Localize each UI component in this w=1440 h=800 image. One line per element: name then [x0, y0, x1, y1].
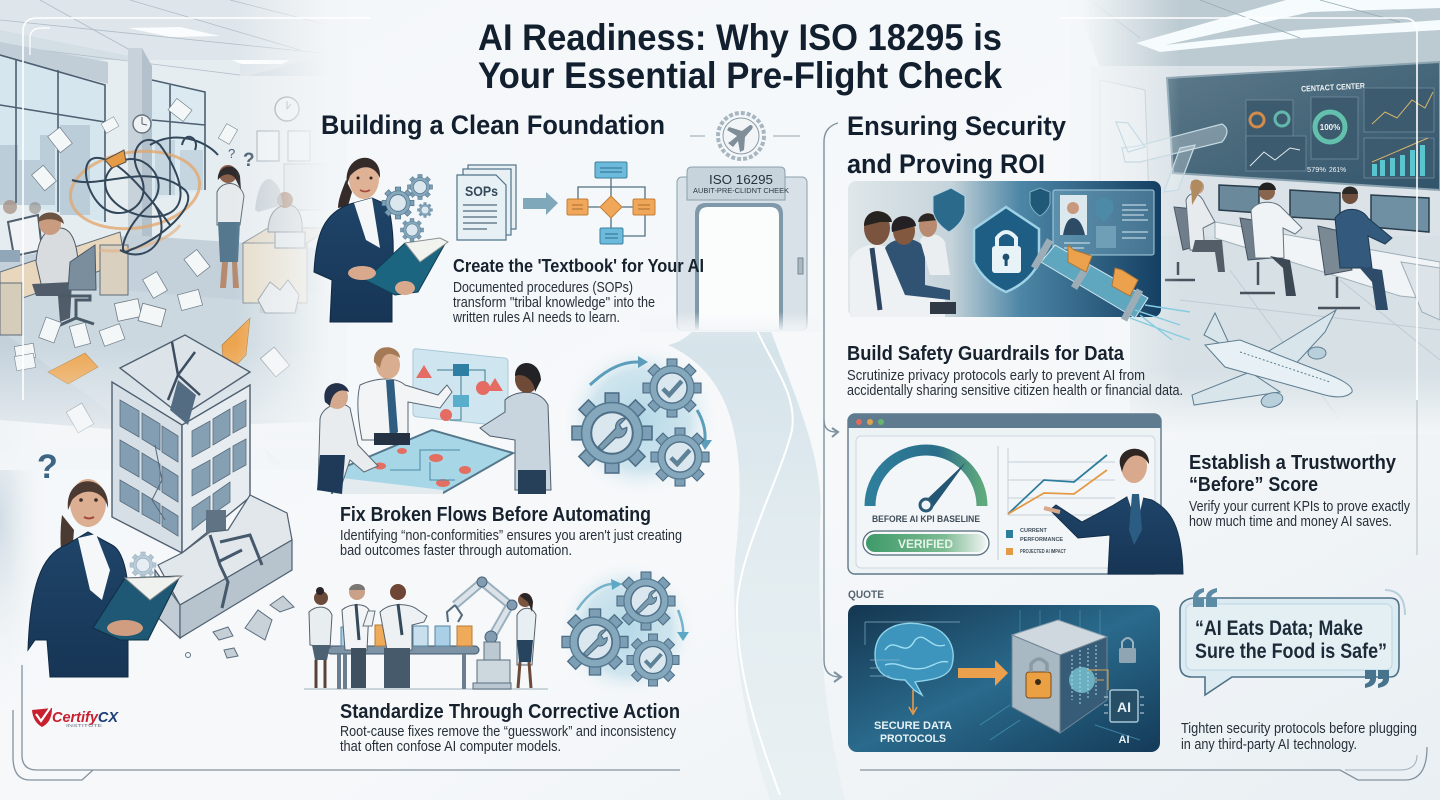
wall dashboard screen: 261% — [1329, 167, 1346, 174]
quote text: “AI Eats Data; Make — [1195, 616, 1363, 640]
ghost wireframe plane — [1116, 122, 1227, 192]
text block: safety guardrails: Build Safety Guardrails for Data — [847, 343, 1125, 365]
floating gears — [382, 174, 432, 242]
wall dashboard screen: CENTACT CENTER — [1301, 81, 1365, 94]
process flowchart icon — [567, 162, 655, 244]
SOP documents icon: SOPs — [465, 183, 498, 199]
text block: textbook: written rules AI needs to learn. — [452, 310, 620, 326]
quote bubble — [1180, 588, 1405, 695]
text block: corrective action: Root-cause fixes remove the “guesswork” and inconsistency — [340, 724, 677, 740]
person: man with phone — [380, 584, 427, 688]
CertifyCX logo: CertifyCX — [52, 709, 119, 726]
standing confused woman: ? — [243, 150, 255, 171]
wall dashboard screen: 579% — [1307, 167, 1326, 174]
right scene: contact center — [1070, 0, 1440, 435]
text block: before score: Verify your current KPIs to prove exactly — [1189, 499, 1411, 515]
plane badge — [690, 113, 800, 159]
CertifyCX logo: INSTITUTE — [66, 723, 102, 728]
main title: Your Essential Pre-Flight Check — [478, 55, 1002, 96]
standing confused woman: ? — [228, 146, 235, 161]
office floor — [0, 235, 345, 430]
blue airliner — [1192, 310, 1352, 410]
section heading: security and ROI: and Proving ROI — [847, 149, 1045, 179]
question mark icon: ? — [37, 448, 58, 486]
gauge — [870, 450, 982, 511]
robot arm — [447, 577, 517, 689]
ISO audit arch — [640, 167, 820, 332]
tangled process scribble — [65, 137, 218, 254]
man right — [480, 363, 551, 494]
quote text: Sure the Food is Safe” — [1195, 639, 1387, 663]
man with tie — [358, 347, 452, 445]
person: woman right — [517, 593, 536, 688]
wall dashboard screen — [1167, 62, 1440, 190]
team reviewing broken flows — [317, 347, 551, 494]
text block: safety guardrails — [847, 343, 1183, 399]
presenter in suit — [1044, 449, 1183, 574]
standing confused woman — [217, 146, 255, 288]
verified pill: VERIFIED — [898, 537, 953, 551]
left edge shading — [0, 330, 48, 710]
repair gears diagram — [564, 344, 716, 496]
brain label: SECURE DATA — [874, 720, 952, 732]
desk with monitors — [1215, 185, 1440, 320]
windows with city skyline — [0, 55, 205, 222]
citizen profile panel — [1053, 190, 1154, 255]
woman with glowing book, lower left — [28, 479, 182, 677]
section heading: security and ROI — [847, 111, 1066, 179]
orange arrow — [958, 660, 1008, 686]
opening quotation mark — [1193, 588, 1217, 607]
line chart — [1008, 448, 1115, 515]
background workers and desk — [243, 179, 330, 313]
text block: textbook: Documented procedures (SOPs) — [453, 280, 633, 296]
section heading: security and ROI: Ensuring Security — [847, 111, 1066, 141]
section heading: clean foundation: Building a Clean Foundation — [321, 110, 665, 140]
orange folder in scribble — [105, 150, 126, 168]
CertifyCX logo — [32, 708, 119, 728]
text block: textbook — [452, 255, 704, 326]
text block: corrective action: that often confose AI computer models. — [340, 739, 561, 755]
left scene: chaotic office — [0, 0, 347, 470]
chart legend: PERFORMANCE — [1020, 537, 1063, 543]
woman left — [317, 383, 378, 494]
text block: textbook: transform "tribal knowledge" into the — [453, 295, 655, 311]
vault — [1012, 620, 1107, 733]
ceiling and wall — [1075, 0, 1440, 236]
verified pill — [863, 531, 989, 555]
padlock shield — [974, 207, 1039, 292]
small shields — [933, 188, 965, 232]
card: KPI baseline dashboard — [848, 414, 1183, 574]
pre-flight road — [668, 273, 845, 800]
text block: corrective action: Standardize Through Corrective Action — [340, 701, 680, 723]
worker slumped at desk — [0, 200, 128, 335]
card: data security illustration — [848, 181, 1190, 340]
conveyor team and robot arm — [304, 577, 548, 690]
brain label — [874, 720, 952, 745]
small padlock — [1119, 638, 1136, 663]
fade edge of left scene — [235, 0, 347, 440]
AI chip: AI — [1117, 699, 1131, 715]
text block: broken flows: Identifying “non-conformities” ensures you aren't just creating — [340, 528, 682, 544]
arch sublabel: AUBIT-PRE-CLIDNT CHEEK — [693, 188, 789, 195]
brain label: PROTOCOLS — [880, 733, 946, 745]
text block: before score: how much time and money AI saves. — [1189, 514, 1392, 530]
closing quotation mark — [1365, 670, 1389, 688]
quote text — [1195, 616, 1387, 663]
text block: tighten security — [1181, 721, 1417, 753]
text block: before score: Establish a Trustworthy — [1189, 452, 1397, 474]
woman with textbook and gears — [314, 158, 448, 322]
corrective action gears diagram — [559, 562, 695, 698]
card: secure data protocols — [848, 605, 1160, 752]
text block: broken flows — [340, 504, 682, 559]
SOP documents icon — [457, 165, 516, 240]
ground line — [304, 688, 548, 690]
bracket with arrows — [824, 123, 841, 682]
arrow to flowchart — [523, 192, 558, 215]
conveyor belt — [327, 646, 479, 689]
arch label: ISO 16295 — [709, 173, 773, 187]
brain icon — [865, 622, 960, 714]
main title: AI Readiness: Why ISO 18295 is — [478, 17, 1002, 58]
chart legend: CURRENT — [1020, 528, 1048, 534]
office ceiling and walls — [0, 0, 345, 300]
chart legend: PROJECTED AI IMPACT — [1020, 549, 1066, 555]
text block: corrective action — [340, 701, 680, 755]
scattered papers — [14, 98, 290, 468]
text block: before score — [1189, 452, 1411, 530]
text block: safety guardrails: accidentally sharing sensitive citizen health or financial data. — [847, 383, 1183, 399]
chip label: AI — [1118, 734, 1130, 746]
documents on belt — [341, 625, 472, 646]
text block: broken flows: bad outcomes faster through automation. — [340, 543, 572, 559]
text block: broken flows: Fix Broken Flows Before Automating — [340, 504, 651, 526]
text block: tighten security: in any third-party AI technology. — [1181, 737, 1357, 753]
AI chip — [1088, 670, 1144, 722]
data pipe with folders — [1034, 240, 1190, 340]
wall dashboard screen: 100% — [1320, 123, 1340, 132]
analysts at computers — [850, 211, 956, 317]
text block: before score: “Before” Score — [1189, 474, 1318, 496]
main title — [478, 17, 1002, 96]
wall clocks and certificates — [133, 97, 328, 210]
crumbling building on cracked foundation — [112, 335, 294, 658]
person: woman with tablet — [309, 587, 332, 688]
operators in chairs — [1165, 180, 1392, 310]
quote section label: QUOTE — [848, 589, 884, 601]
gauge label: BEFORE AI KPI BASELINE — [872, 514, 980, 525]
text block: safety guardrails: Scrutinize privacy protocols early to prevent AI from — [847, 368, 1145, 384]
person: man with clipboard — [342, 584, 375, 688]
chart legend — [1006, 528, 1066, 555]
contact center floor — [1130, 236, 1440, 432]
fade edge of right scene — [1070, 0, 1180, 435]
text block: textbook: Create the 'Textbook' for Your AI — [453, 255, 704, 276]
